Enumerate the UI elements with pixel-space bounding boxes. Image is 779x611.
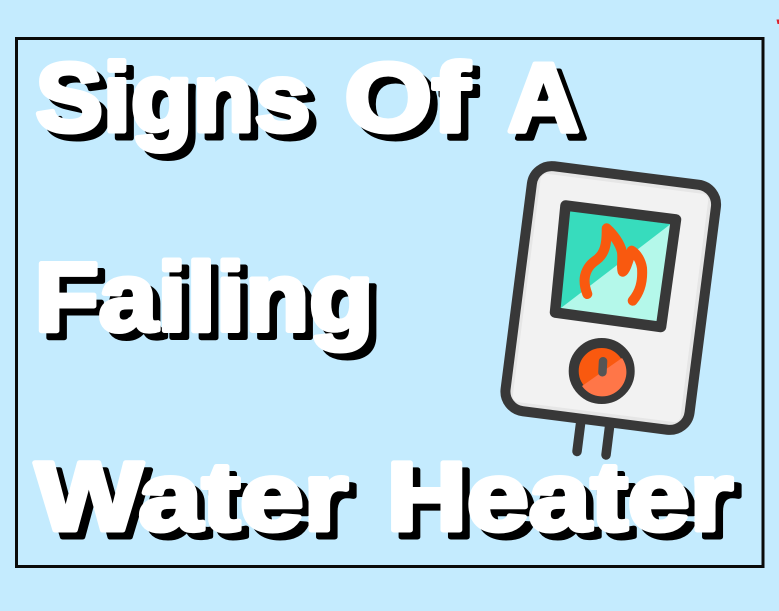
red corner mark bbox=[776, 20, 779, 24]
title shadow: Water bbox=[42, 449, 356, 558]
title shadow: Of bbox=[352, 50, 478, 159]
title text: Failing bbox=[34, 242, 374, 352]
icon: flame bbox=[585, 228, 642, 301]
title shadow: Heater bbox=[394, 449, 740, 558]
title shadow bbox=[42, 50, 740, 558]
title shadow: Failing bbox=[42, 250, 381, 358]
water heater icon bbox=[503, 164, 718, 455]
title text: A bbox=[508, 43, 580, 152]
title text: Heater bbox=[386, 442, 733, 551]
title bbox=[34, 43, 740, 558]
title text bbox=[34, 43, 733, 551]
icon: pipes bbox=[577, 420, 610, 455]
icon: screen bbox=[555, 206, 676, 327]
title text: Signs bbox=[36, 43, 310, 152]
title text: Water bbox=[35, 442, 348, 551]
icon: dial bbox=[574, 343, 630, 399]
title shadow: Signs bbox=[43, 50, 318, 159]
title shadow: A bbox=[515, 50, 587, 159]
icon: heater body bbox=[503, 164, 718, 432]
title text: Of bbox=[344, 43, 470, 152]
